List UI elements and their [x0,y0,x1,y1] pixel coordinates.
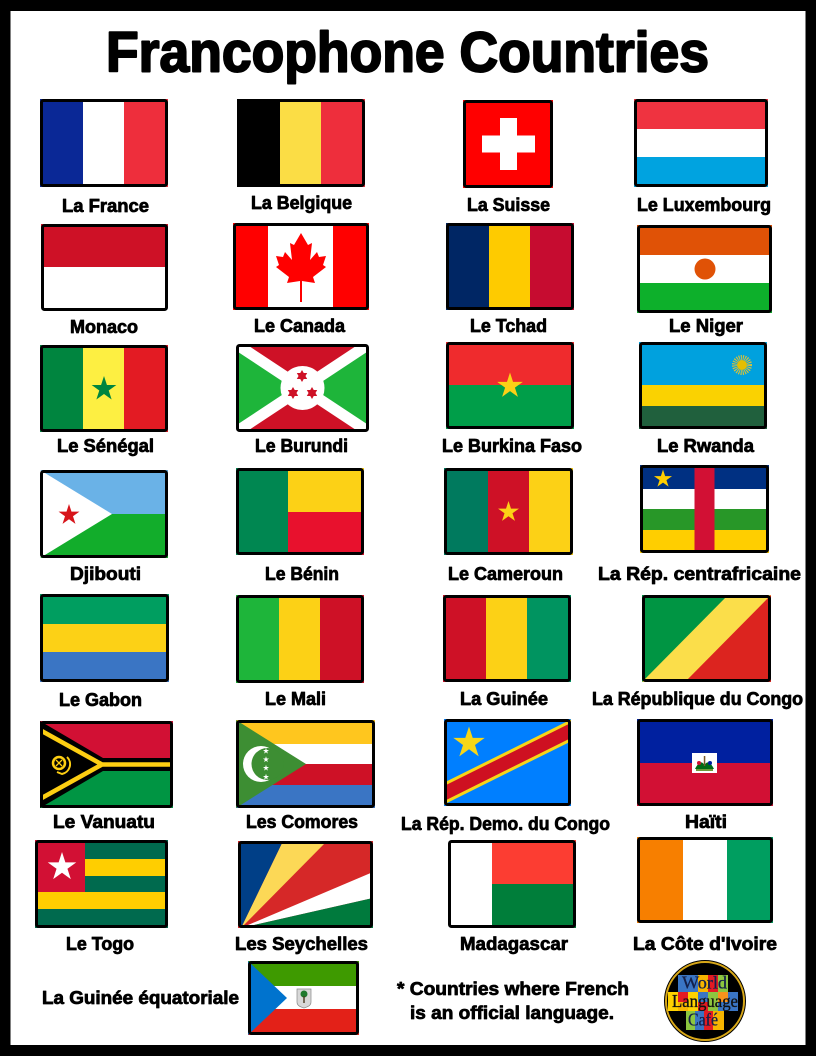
label: Le Tchad: Le Tchad [470,316,547,336]
flag: Cameroon [444,468,573,555]
title: Francophone Countries [106,20,709,84]
label: La Belgique: La Belgique [251,193,352,213]
flag: Haiti [637,719,773,806]
label: Le Sénégal: Le Sénégal [57,436,154,456]
label: La France: La France [62,196,149,216]
flag: Senegal [40,345,168,432]
flag: Canada [233,223,369,310]
label: Monaco: Monaco [70,317,138,337]
label: La Guinée équatoriale: La Guinée équatoriale [42,988,239,1008]
label: La Suisse: La Suisse [467,195,550,215]
flag: Niger [637,225,772,313]
label: Le Bénin: Le Bénin [265,564,339,584]
flag: Chad [446,223,574,310]
label: Le Togo: Le Togo [66,934,134,954]
label: La Rép. Demo. du Congo: La Rép. Demo. du Congo [401,814,610,834]
label: Le Rwanda: Le Rwanda [657,436,755,456]
logo: World Language Café: Café [688,1010,718,1030]
logo: World Language Café: World [682,972,727,992]
flag: Switzerland [463,100,553,188]
flag: Luxembourg [634,99,768,187]
label: Le Niger: Le Niger [669,316,743,336]
label: Le Burundi: Le Burundi [255,436,348,456]
label: La Rép. centrafricaine: La Rép. centrafricaine [598,564,801,584]
footnote: is an official language. [410,1003,614,1023]
label: Les Seychelles: Les Seychelles [235,934,368,954]
label: Le Burkina Faso: Le Burkina Faso [442,436,582,456]
label: Les Comores: Les Comores [246,812,358,832]
logo: World Language Café [664,960,746,1042]
label: La République du Congo: La République du Congo [592,689,803,709]
flag: Monaco [41,224,168,311]
footnote: * Countries where French [397,979,629,999]
flag: Mali [236,595,364,683]
flag: Guinea [443,595,571,682]
flag: France [40,99,168,187]
flag: Belgium [237,99,365,187]
flag: Comoros [236,720,375,808]
label: La Côte d'Ivoire: La Côte d'Ivoire [633,934,777,954]
label: Djibouti: Djibouti [70,564,141,584]
logo: World Language Café: Language [672,991,738,1011]
flag: Central African Republic [640,465,769,553]
flag: Gabon [40,594,169,682]
flag: Seychelles [238,841,373,928]
flag: Ivory Coast [637,837,773,923]
flag: Burkina Faso [446,342,574,429]
flag: Togo [35,840,168,928]
footnote [397,979,629,1023]
label: Le Luxembourg: Le Luxembourg [637,195,771,215]
flag: Madagascar [448,840,576,928]
label: La Guinée: La Guinée [460,689,548,709]
label: Le Canada: Le Canada [254,316,346,336]
flag: Djibouti [40,470,168,558]
label: Le Vanuatu: Le Vanuatu [53,812,155,832]
label: Madagascar: Madagascar [460,934,568,954]
label: Le Mali: Le Mali [265,689,326,709]
label: Haïti: Haïti [685,812,727,832]
label: Le Gabon: Le Gabon [59,690,142,710]
label: Le Cameroun: Le Cameroun [448,564,563,584]
flag: Benin [236,468,364,555]
flag: Rwanda [639,342,767,429]
flag: Burundi [236,344,369,432]
flag: Democratic Republic of the Congo [444,719,571,806]
flag: Equatorial Guinea [248,961,359,1035]
flag: Vanuatu [40,721,173,808]
flag: Republic of the Congo [642,595,771,682]
